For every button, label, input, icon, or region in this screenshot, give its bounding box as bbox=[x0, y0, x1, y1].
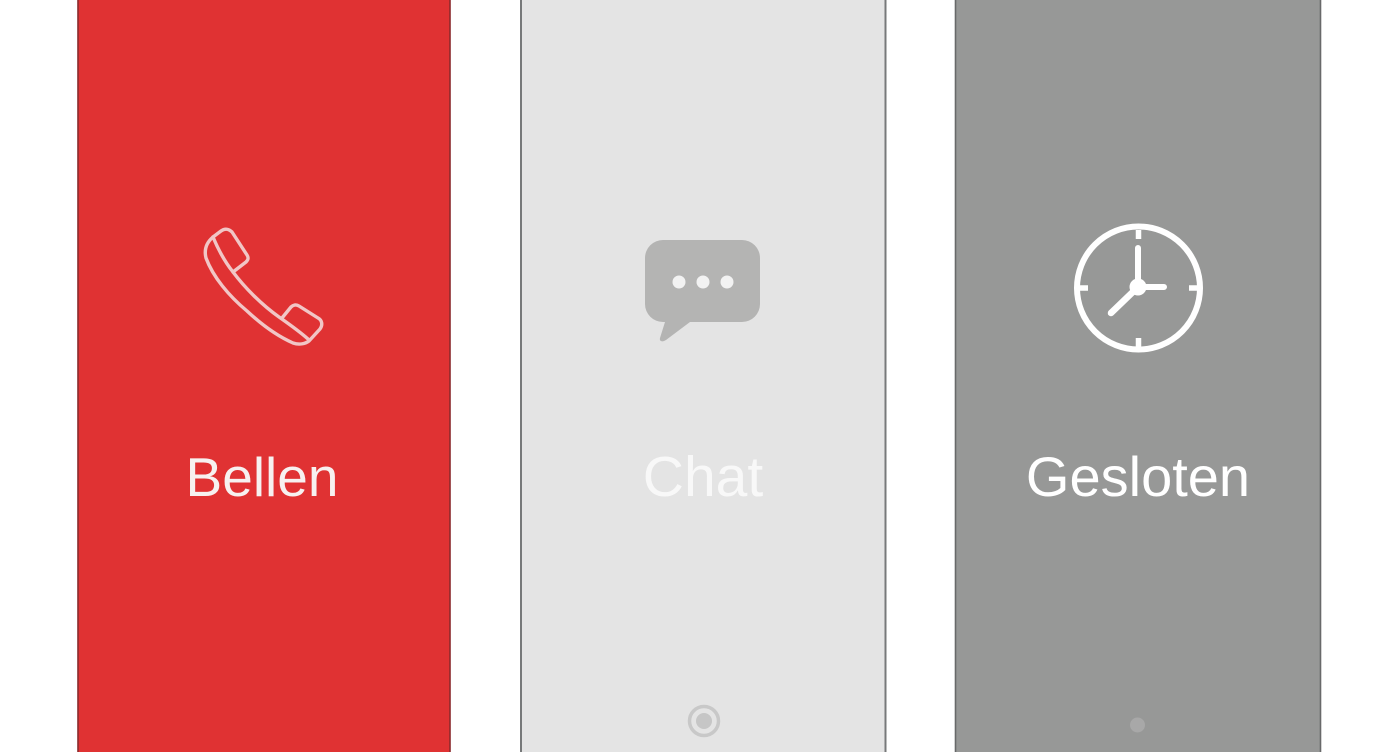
icon: phone handset bbox=[205, 229, 322, 344]
panel: Gesloten bbox=[956, 0, 1320, 752]
icon: chat bubble bbox=[645, 240, 760, 341]
icon: radio dot bbox=[690, 706, 718, 736]
icon: clock bbox=[1077, 226, 1200, 350]
label: Chat: Chat bbox=[643, 445, 763, 509]
label: Bellen: Bellen bbox=[186, 446, 338, 508]
panel: Bellen bbox=[78, 0, 450, 752]
label: Gesloten: Gesloten bbox=[1026, 445, 1250, 508]
icon: status dot bbox=[1130, 718, 1145, 732]
panel: Chat bbox=[521, 0, 886, 752]
